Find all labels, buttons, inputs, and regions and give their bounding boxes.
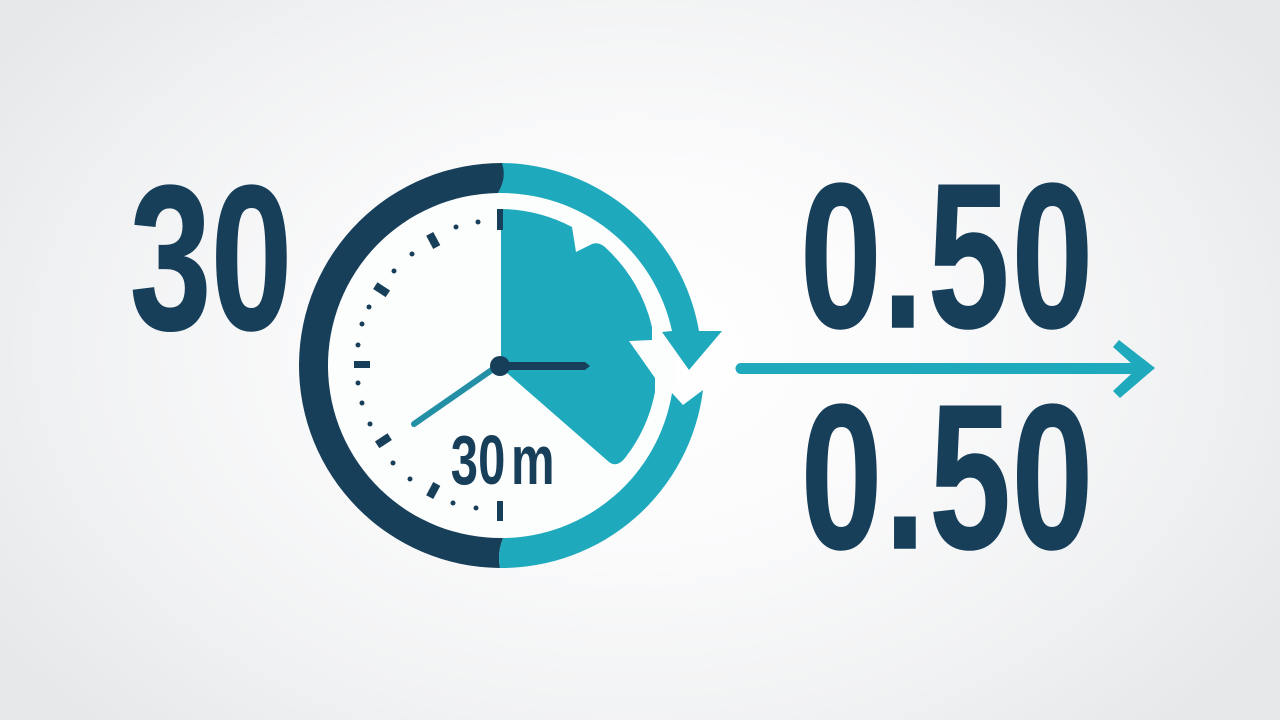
number: top 0.50: 0.50: [800, 140, 1093, 371]
dark clock hand: [503, 362, 590, 370]
arrow pointing right: [741, 340, 1155, 398]
ring: dark half: [299, 163, 504, 568]
teal clock hand: [414, 367, 496, 424]
teal elapsed wedge: [501, 209, 655, 464]
clock face: [326, 190, 676, 540]
number: 30: 30: [130, 142, 292, 373]
number: bottom 0.50: 0.50: [801, 361, 1093, 592]
ring: teal lower arc: [499, 390, 703, 568]
clock label: 30m: 30m: [451, 420, 555, 499]
ring: teal upper arc with arrow head: [498, 163, 722, 370]
clock hub: [490, 356, 510, 376]
stopwatch clock: [299, 163, 722, 568]
minute ticks: [354, 209, 503, 521]
